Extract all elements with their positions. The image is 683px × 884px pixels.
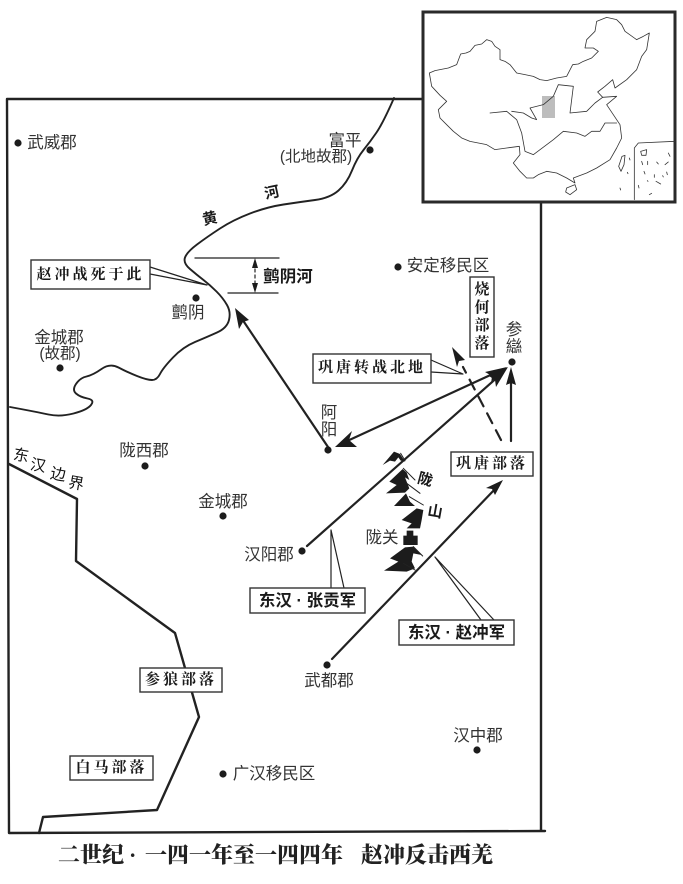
caption title: 一四一年至一四四年 — [145, 842, 343, 868]
Yangtze — [490, 111, 617, 155]
place: Ayang: 阳 — [321, 420, 337, 439]
border label — [12, 445, 85, 494]
label: Canlang tribe — [140, 668, 222, 692]
border label: 边 — [49, 464, 68, 485]
Yellow River label — [201, 183, 281, 229]
place: Canluan: 䜌 — [506, 337, 522, 356]
callout: Gongtang moves to Beidi — [313, 354, 463, 383]
place: Fuping — [280, 131, 374, 166]
Eastern Han border — [9, 445, 199, 833]
border label: 汉 — [29, 455, 48, 476]
label: Shaohe tribe: 烧 — [473, 281, 490, 298]
mountains: Long range — [383, 452, 423, 572]
place: Jincheng: 金城郡 — [198, 492, 248, 511]
label: Shaohe tribe: 落 — [474, 334, 490, 352]
China outline — [429, 17, 649, 183]
callout: Eastern Han, Zhang Gong army — [250, 530, 365, 613]
place: Fuping: 富平 — [328, 131, 362, 150]
label: Gongtang tribe: 巩唐部落 — [456, 454, 528, 472]
callout: Gongtang moves to Beidi: 巩唐转战北地 — [318, 358, 426, 376]
place: Fuping: (北地故郡) — [280, 148, 352, 166]
place: Wudu — [304, 661, 354, 690]
caption title: 二世纪 — [58, 842, 124, 868]
Heyin river span marker: 鹯阴河 — [263, 266, 313, 286]
label: Baima tribe — [70, 756, 153, 780]
place: Anding resettlement area: 安定移民区 — [407, 256, 489, 275]
place: Ayang: 阿 — [321, 403, 337, 422]
caption title — [58, 842, 493, 868]
callout: Zhao Chong died here — [31, 260, 207, 289]
arrow: Ayang to Heyin — [235, 308, 328, 447]
arrow: Canluan to Ayang — [335, 367, 507, 447]
place: Wudu: 武都郡 — [304, 671, 354, 690]
place: Hanzhong: 汉中郡 — [453, 726, 503, 745]
caption title: 赵冲反击西羌 — [361, 842, 493, 868]
label: Baima tribe: 白马部落 — [75, 758, 148, 776]
Hainan — [566, 185, 577, 195]
arrow: Wudu to Gongtang tribe — [332, 480, 503, 659]
Yellow River — [512, 85, 603, 120]
label: Gongtang tribe — [451, 452, 533, 476]
place: Canluan: 参 — [506, 320, 522, 339]
label: Canlang tribe: 参狼部落 — [145, 670, 217, 688]
Islands — [620, 150, 670, 195]
label: Shaohe tribe: 部 — [474, 317, 490, 334]
place: Jincheng former commandery — [34, 328, 84, 372]
Yellow River label: 黄 — [201, 208, 219, 229]
arrow: Hanyang to Canluan — [307, 367, 508, 546]
mountain label: 陇 — [416, 469, 435, 490]
highlighted region — [542, 96, 555, 118]
place: Canluan — [506, 320, 522, 366]
inset map of China — [423, 12, 675, 202]
mountain label — [416, 469, 444, 522]
caption title: · — [129, 842, 136, 868]
arrow: Gongtang tribe north — [506, 367, 516, 441]
place: Ayang — [321, 403, 337, 454]
Yellow River label: 河 — [263, 183, 281, 203]
Yellow River — [10, 98, 394, 416]
place: Longxi — [119, 441, 169, 470]
dashed arrow: Gongtang tribe to north land — [452, 347, 501, 440]
place: Heyin — [172, 294, 204, 322]
callout: Eastern Han, Zhang Gong army: 东汉 · 张贡军 — [259, 590, 356, 610]
border label: 界 — [67, 474, 85, 494]
Heyin river span marker — [195, 258, 313, 293]
callout: Zhao Chong died here: 赵冲战死于此 — [36, 265, 145, 283]
place: Jincheng former commandery: 金城郡 — [34, 328, 84, 347]
border label: 东 — [12, 445, 30, 466]
mountain label: 山 — [426, 502, 444, 522]
place: Hanyang: 汉阳郡 — [244, 545, 294, 564]
map frame — [7, 99, 545, 833]
place: Heyin: 鹯阴 — [172, 303, 204, 322]
place: Jincheng former commandery: (故郡) — [39, 344, 81, 362]
place: Hanzhong — [453, 726, 503, 754]
place: Long Pass: 陇关 — [366, 528, 398, 547]
callout: Eastern Han, Zhao Chong army — [399, 557, 514, 645]
South China Sea inset — [634, 141, 675, 200]
place: Jincheng — [198, 492, 248, 520]
place: Longxi: 陇西郡 — [119, 441, 169, 460]
place: Guanghan resettlement area: 广汉移民区 — [233, 764, 315, 783]
label: Shaohe tribe — [470, 277, 494, 357]
Taiwan — [619, 155, 625, 171]
label: Shaohe tribe: 何 — [474, 298, 490, 316]
place: Wuwei: 武威郡 — [27, 133, 77, 152]
callout: Eastern Han, Zhao Chong army: 东汉 · 赵冲军 — [408, 622, 505, 642]
